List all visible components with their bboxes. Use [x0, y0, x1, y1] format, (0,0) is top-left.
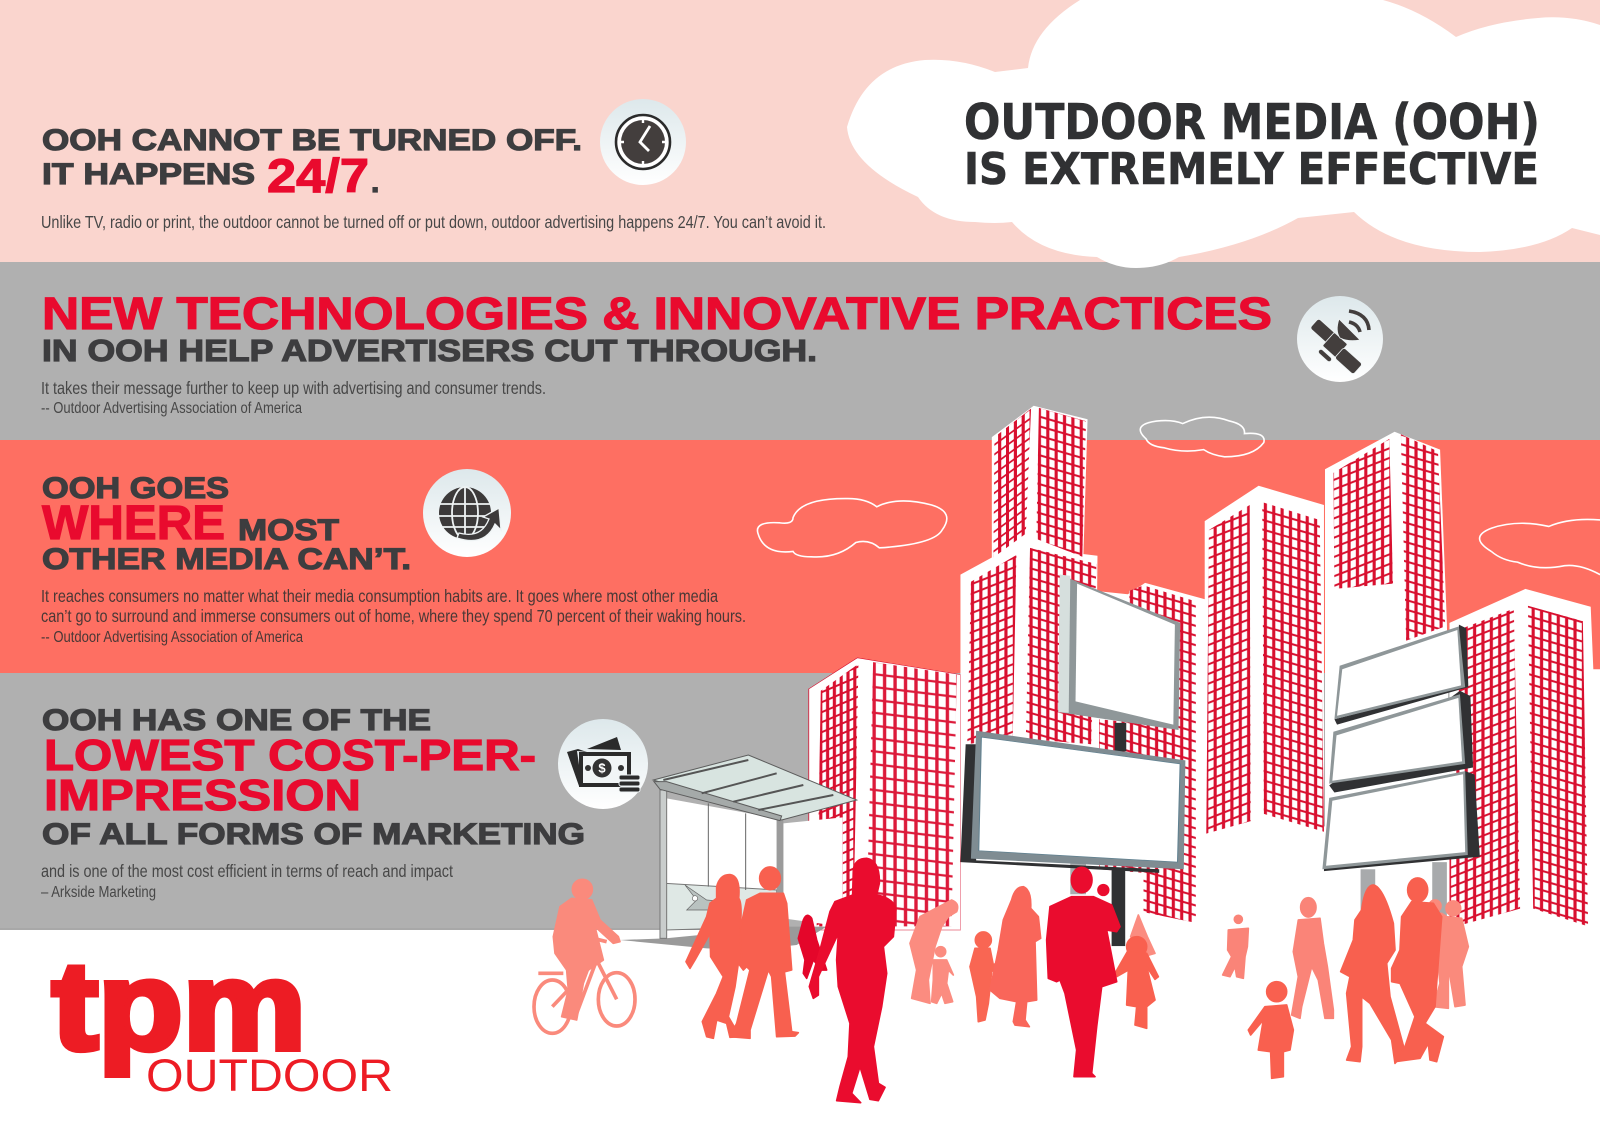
body text: where: It reaches consumers no matter what their media consumption habits are. It goes where most other media	[41, 586, 718, 606]
logo: tpm outdoor: tpm	[52, 937, 306, 1076]
heading: new technologies	[42, 288, 1272, 368]
icon: satellite	[1297, 296, 1383, 382]
body text: where: -- Outdoor Advertising Association of America	[41, 629, 303, 646]
icon: money	[558, 719, 648, 809]
heading: lowest cost: OF ALL FORMS OF MARKETING	[42, 818, 585, 851]
billboard: large centre	[960, 731, 1185, 873]
body text: where: can’t go to surround and immerse consumers out of home, where they spend 70 percent of their waking hours.	[41, 606, 746, 626]
heading: new technologies: IN OOH HELP ADVERTISERS CUT THROUGH.	[42, 333, 817, 368]
building: upper right tower	[1325, 432, 1452, 930]
ground strip	[0, 928, 1600, 1131]
building: far left	[809, 658, 960, 930]
city illustration	[757, 406, 1600, 946]
title	[964, 94, 1540, 195]
body text: new technologies: It takes their message further to keep up with advertising and consumer trends.	[41, 378, 546, 398]
girl with light hair	[1131, 915, 1155, 957]
heading: lowest cost: LOWEST COST-PER-	[44, 731, 536, 780]
bending adult and toddler	[910, 900, 958, 1003]
base fill between buildings	[958, 826, 1600, 930]
heading: cannot be turned off	[42, 124, 582, 202]
heading: goes where	[42, 472, 411, 576]
icon: globe	[423, 469, 511, 557]
woman in dress	[990, 887, 1041, 1027]
panel: new technologies	[0, 262, 1600, 440]
shelter shadow	[620, 927, 827, 950]
body text: where	[41, 586, 746, 646]
billboard: upper centre	[1058, 575, 1180, 730]
main woman	[809, 858, 896, 1103]
logo: tpm outdoor	[52, 937, 393, 1101]
icon: money: $	[598, 760, 606, 776]
main cloud	[847, 0, 1600, 268]
body text: lowest cost	[41, 861, 453, 901]
heading: goes where: OOH GOES	[42, 472, 229, 505]
title: IS EXTREMELY EFFECTIVE	[964, 144, 1539, 195]
heading: cannot be turned off: 24/7	[267, 149, 369, 202]
icon: clock	[600, 99, 686, 185]
billboard poles	[1070, 723, 1447, 946]
walking woman	[686, 875, 750, 1038]
heading: goes where: OTHER MEDIA CAN’T.	[42, 543, 411, 576]
woman in shorts	[1292, 898, 1333, 1018]
heading: cannot be turned off: .	[371, 166, 379, 199]
body text: new technologies	[41, 378, 546, 417]
child in red	[798, 915, 827, 978]
heading: lowest cost: OOH HAS ONE OF THE	[42, 704, 431, 737]
foreground man	[1392, 878, 1443, 1062]
man main	[1047, 867, 1120, 1077]
people: right group	[990, 867, 1468, 1078]
building: right centre tall	[1205, 486, 1324, 930]
body text: new technologies: -- Outdoor Advertising Association of America	[41, 400, 302, 417]
people: left group	[534, 858, 1012, 1103]
heading: lowest cost: IMPRESSION	[44, 771, 361, 820]
heading: goes where: WHERE	[42, 497, 225, 550]
heading: lowest cost	[42, 704, 585, 851]
small boy	[1223, 915, 1248, 978]
panel: lowest cost per impression	[0, 673, 1600, 929]
body text: 24/7: Unlike TV, radio or print, the outdoor cannot be turned off or put down, outdoor advertising happens 24/7. You can’t avoid it.	[41, 212, 826, 232]
logo: tpm outdoor: OUTDOOR	[146, 1050, 393, 1101]
child holding hands	[970, 932, 1012, 1022]
billboards: right stack	[1322, 625, 1480, 871]
body text: lowest cost: – Arkside Marketing	[41, 884, 156, 901]
bus shelter	[620, 755, 857, 950]
heading: cannot be turned off: IT HAPPENS	[42, 158, 255, 191]
sky clouds	[757, 417, 1600, 575]
body text: lowest cost: and is one of the most cost efficient in terms of reach and impact	[41, 861, 453, 881]
building: behind billboards	[1094, 583, 1206, 930]
toddler in dress	[1248, 982, 1293, 1078]
building: far right	[1449, 589, 1600, 930]
building: central tower	[960, 406, 1097, 930]
heading: cannot be turned off: OOH CANNOT BE TURNED OFF.	[42, 124, 582, 157]
heading: new technologies: NEW TECHNOLOGIES & INNOVATIVE PRACTICES	[42, 288, 1272, 339]
cyclist	[534, 879, 635, 1033]
heading: goes where: MOST	[238, 514, 339, 547]
foreground woman	[1341, 885, 1405, 1063]
walking man	[730, 867, 798, 1038]
panel: 24/7	[0, 0, 1600, 262]
panel: where other media can't	[0, 440, 1600, 673]
couple in background	[1428, 900, 1468, 1008]
